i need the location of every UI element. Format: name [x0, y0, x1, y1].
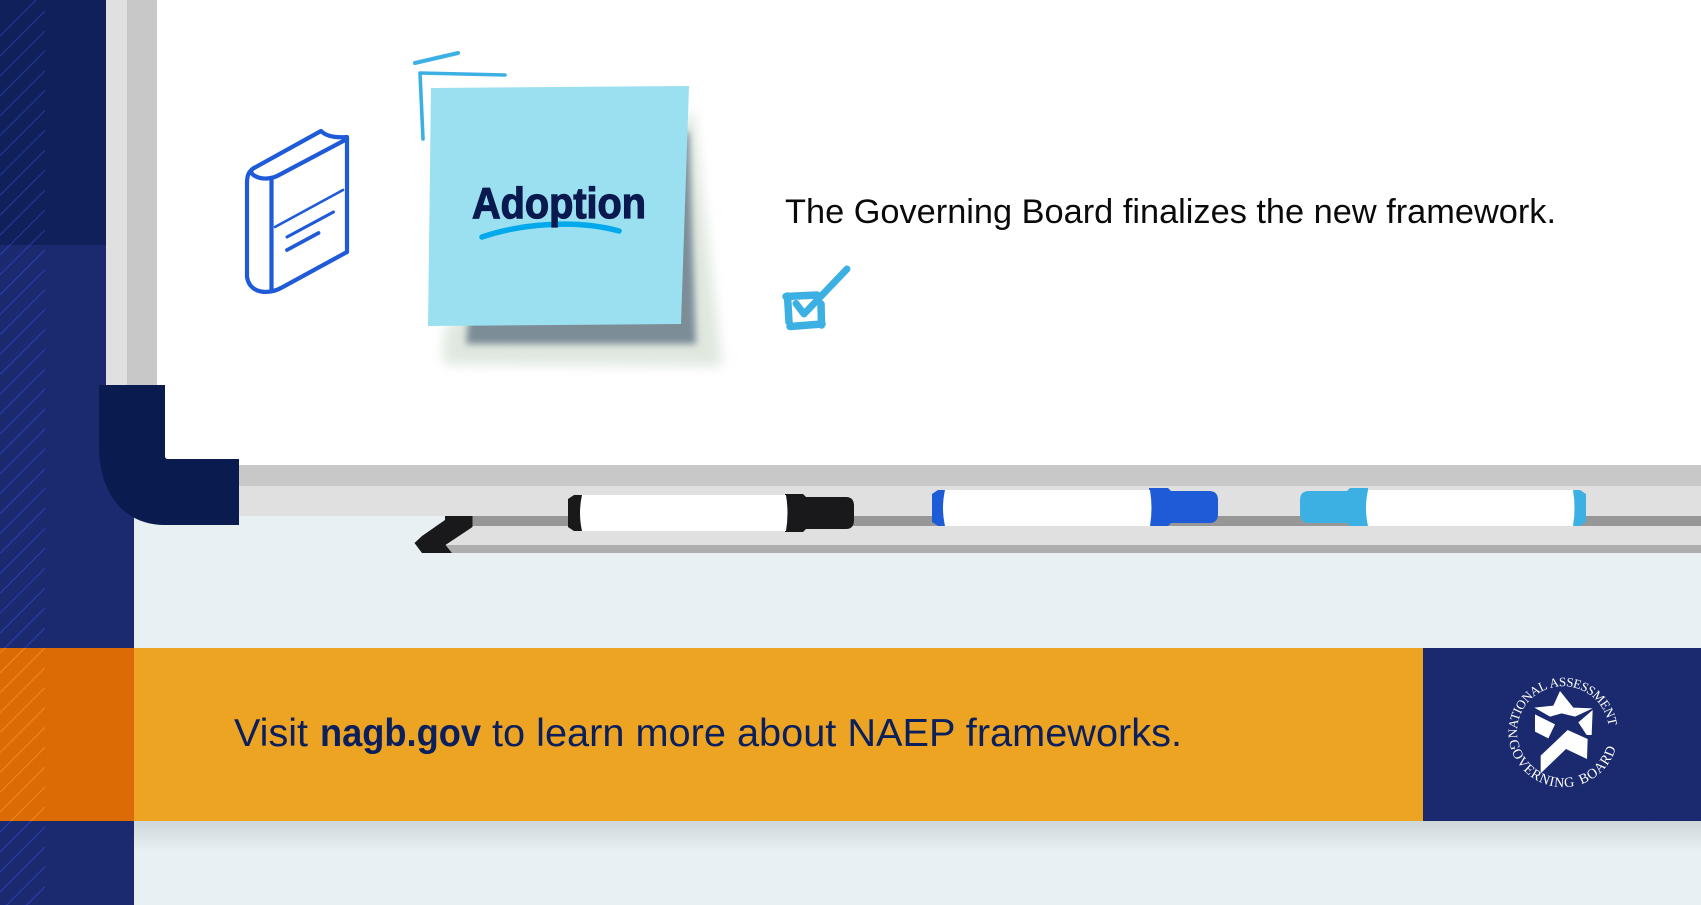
call-to-action banner — [134, 648, 1423, 821]
left color column — [0, 0, 134, 905]
sticky note accent ticks — [415, 53, 505, 139]
logo: National Assessment Governing Board: NATIONAL ASSESSMENT — [1508, 678, 1618, 738]
whiteboard vertical frame — [106, 0, 157, 390]
sticky note shadow — [443, 110, 722, 366]
banner shadow — [134, 821, 1701, 851]
icon: book — [247, 131, 347, 292]
whiteboard surface — [157, 0, 1701, 465]
logo panel — [1423, 648, 1701, 821]
whiteboard marker tray — [200, 465, 1701, 553]
cyan marker — [1300, 488, 1586, 526]
call-to-action text: to learn more about NAEP frameworks. — [492, 712, 1182, 755]
call-to-action text: Visit — [234, 712, 308, 755]
icon: checkbox — [786, 269, 847, 326]
logo: National Assessment Governing Board: GOVERNING BOARD — [1510, 740, 1615, 788]
sticky note heading: Adoption: Adoption — [472, 179, 646, 228]
blue marker — [932, 488, 1218, 526]
call-to-action text: nagb.gov — [320, 712, 481, 755]
tray end bracket — [414, 516, 472, 553]
description text: The Governing Board finalizes the new framework. — [785, 193, 1556, 231]
black marker — [568, 494, 854, 532]
logo: National Assessment Governing Board — [1508, 678, 1618, 788]
frame corner piece — [99, 385, 239, 525]
sticky note — [428, 86, 689, 326]
